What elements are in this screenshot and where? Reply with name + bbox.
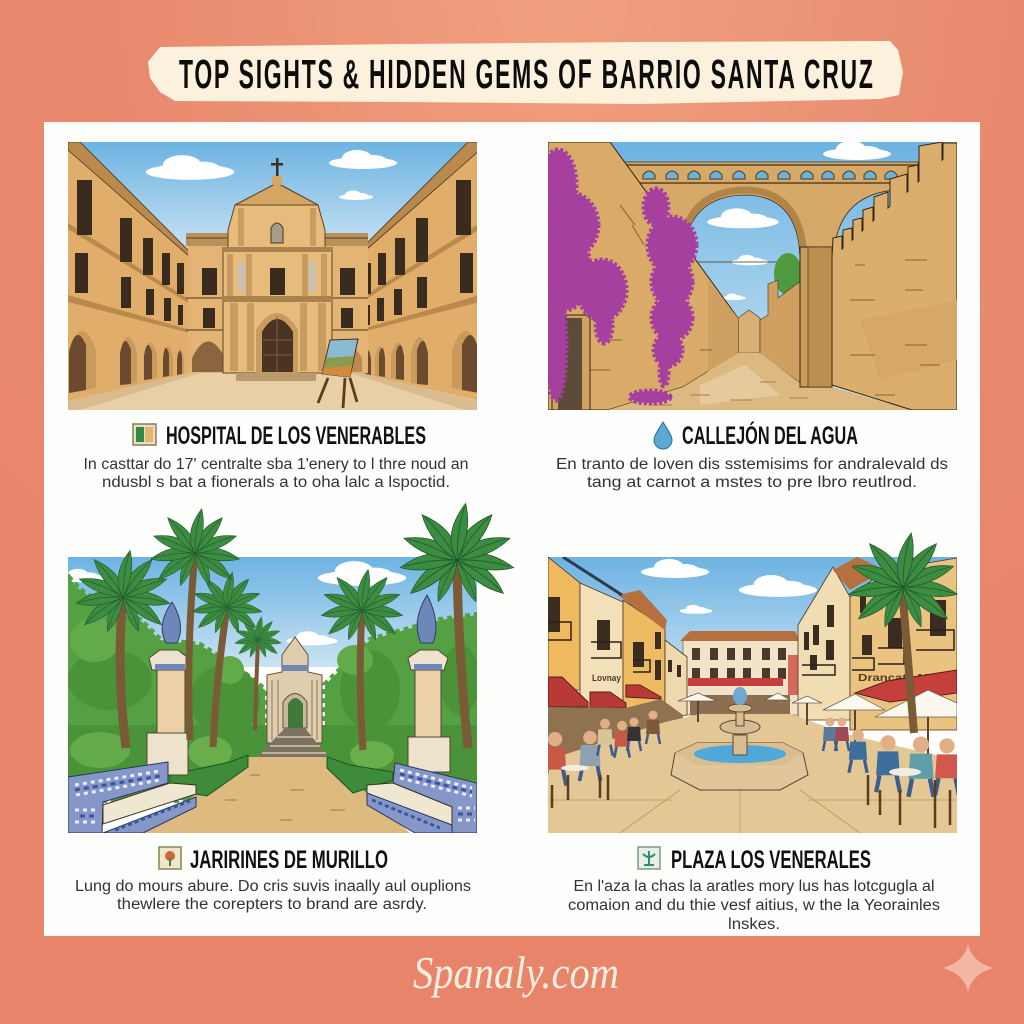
white card panel <box>44 122 980 936</box>
umbrellas <box>678 690 957 717</box>
heading row: PLAZA LOS VENERALES <box>671 846 871 874</box>
heading row <box>133 422 426 450</box>
aqueduct <box>625 162 918 262</box>
description <box>568 878 940 933</box>
panel: Callejon del Agua <box>540 141 957 491</box>
panel: Jardines de Murillo <box>58 502 514 913</box>
description <box>556 456 948 491</box>
sign: Lovnay <box>592 673 621 683</box>
title banner: TOP SIGHTS & HIDDEN GEMS OF BARRIO SANTA CRUZ <box>179 52 873 98</box>
footer brand: Spanaly.com <box>413 947 619 998</box>
ground <box>548 714 957 833</box>
illustration: garden <box>58 502 514 833</box>
right buildings <box>798 567 850 720</box>
trees <box>68 577 477 800</box>
description: comaion and du thie vesf aitius, w the la Yeorainles <box>568 897 940 914</box>
icon: fountain tile <box>638 847 660 869</box>
description: lnskes. <box>728 916 780 933</box>
heading row: CALLEJÓN DEL AGUA <box>682 420 858 450</box>
description: En l'aza la chas la aratles mory lus has lotcgugla al <box>574 878 934 895</box>
right wall <box>832 142 957 410</box>
pillars <box>147 602 188 775</box>
easel <box>318 339 358 408</box>
hedges <box>188 736 232 768</box>
back building <box>683 640 800 715</box>
diners <box>544 710 959 797</box>
path <box>142 757 410 833</box>
illustration: baroque courtyard <box>68 142 480 410</box>
heading row <box>654 420 858 450</box>
illustration: aqueduct alley <box>540 141 957 410</box>
awnings <box>548 677 588 707</box>
left wall <box>548 142 738 410</box>
pillar <box>800 247 832 387</box>
palm trees overflowing frame <box>76 502 514 750</box>
icon: flower tile <box>159 847 181 869</box>
fountain <box>671 687 808 790</box>
description: tang at carnot a mstes to pre lbro reutlrod. <box>587 474 917 491</box>
icon: water drop <box>654 422 672 449</box>
panel: Plaza los Venerales <box>544 532 959 933</box>
icon: sparkle star <box>943 944 993 992</box>
description: Lung do mours abure. Do cris suvis inaally aul ouplions <box>75 878 471 895</box>
illustration: plaza with fountain <box>544 532 959 833</box>
bougainvillea <box>540 150 696 403</box>
description: In casttar do 17' centralte sba 1'enery to l thre noud an <box>84 456 468 473</box>
facade <box>223 183 332 373</box>
heading row: JARIRINES DE MURILLO <box>190 846 388 874</box>
heading row <box>638 846 871 874</box>
illustration: plaza with fountain: Drancata Mac <box>858 673 944 684</box>
heading row: HOSPITAL DE LOS VENERABLES <box>166 422 426 450</box>
door <box>552 315 590 410</box>
description: ndusbl s bat a fionerals a to oha lalc a lspoctid. <box>102 474 450 491</box>
description: thewlere the corepters to brand are asrdy. <box>117 896 427 913</box>
rear block <box>188 245 368 373</box>
description <box>84 456 468 491</box>
icon: building swatch <box>133 424 156 445</box>
ground <box>608 353 912 410</box>
palm tree overflowing frame <box>848 532 958 733</box>
description: En tranto de loven dis sstemisims for andralevald ds <box>556 456 948 473</box>
left buildings <box>548 557 580 690</box>
far buildings and tree <box>774 253 800 294</box>
tiled benches <box>68 762 196 833</box>
panel: Hospital de los Venerables <box>68 142 480 491</box>
heading row <box>159 846 388 874</box>
title banner <box>148 41 903 104</box>
description <box>75 878 471 913</box>
pavilion <box>257 637 328 757</box>
